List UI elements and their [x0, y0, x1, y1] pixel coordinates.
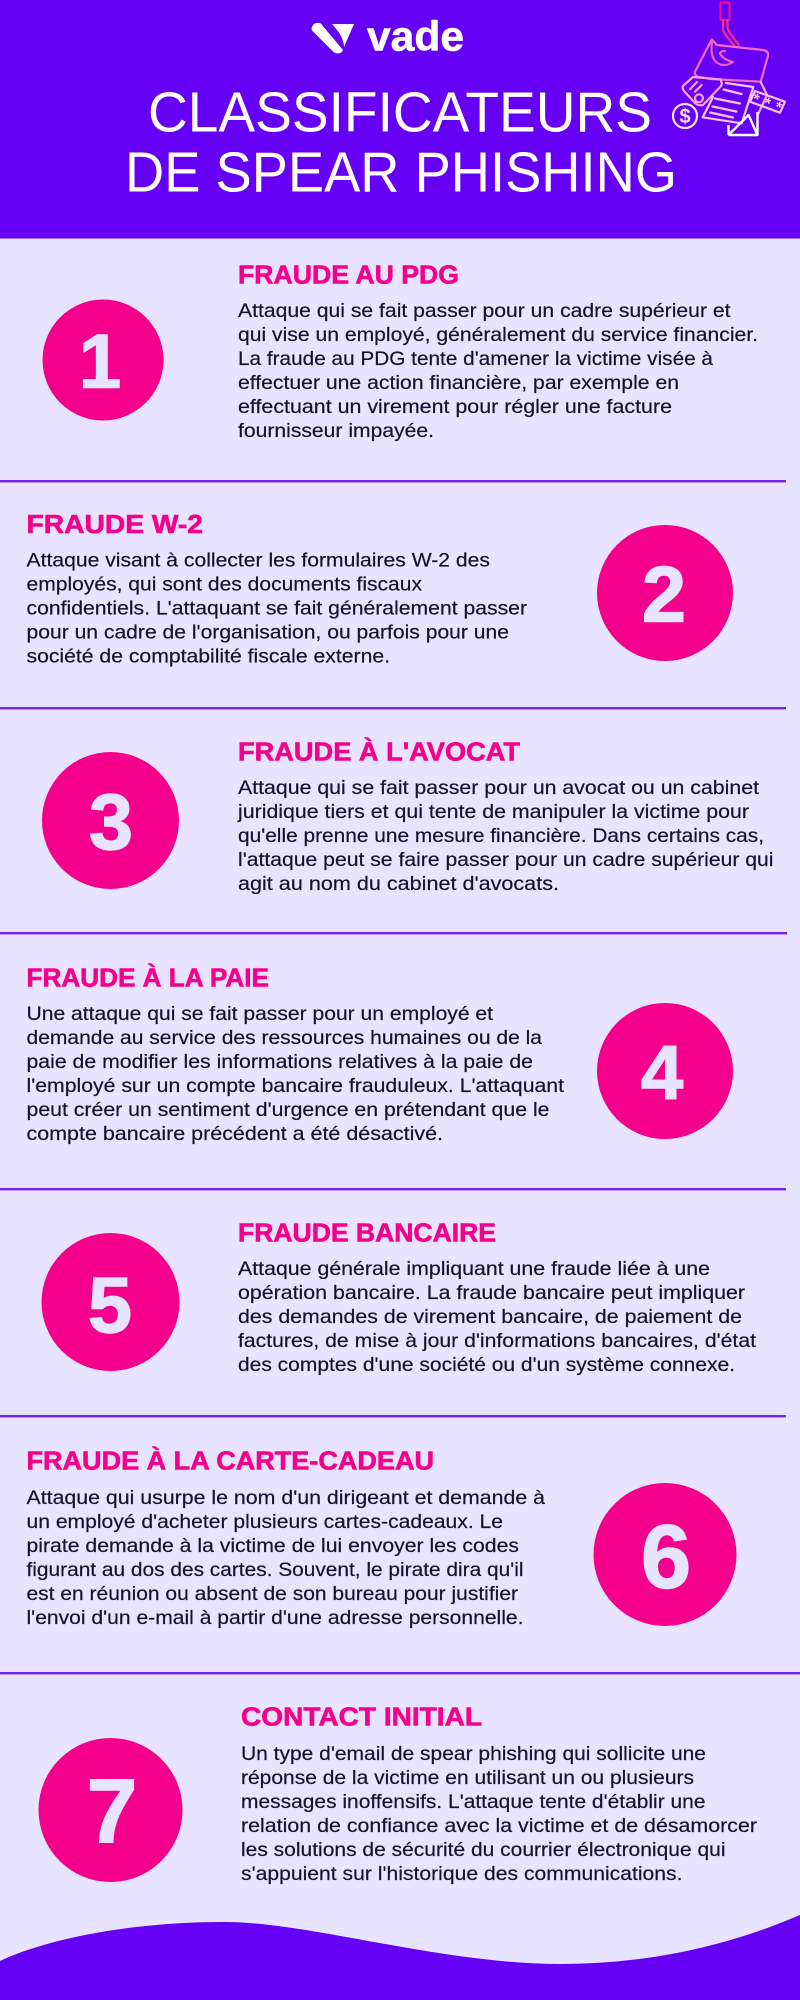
- body text 3: Attaque qui se fait passer pour un avocat ou un cabinet: [238, 777, 760, 799]
- body text 4: [26, 1003, 565, 1145]
- panel 6: fraude à la carte-cadeau: [26, 1446, 736, 1629]
- header banner: [0, 0, 800, 238]
- panel 2: fraude W-2: [26, 511, 733, 668]
- logo: vade: vade: [367, 12, 464, 60]
- body text 1: fournisseur impayée.: [238, 420, 434, 442]
- body text 4: l'employé sur un compte bancaire frauduleux. L'attaquant: [26, 1075, 565, 1097]
- panel 3: fraude à l'avocat: [42, 738, 774, 895]
- heading 6: FRAUDE À LA CARTE-CADEAU: [26, 1446, 434, 1475]
- body text 5: opération bancaire. La fraude bancaire peut impliquer: [238, 1282, 746, 1304]
- title: [125, 80, 677, 204]
- body text 2: [26, 550, 528, 668]
- body text 4: Une attaque qui se fait passer pour un employé et: [26, 1003, 494, 1025]
- number badge 1: [42, 300, 164, 420]
- body text 6: l'envoi d'un e-mail à partir d'une adresse personnelle.: [26, 1607, 524, 1629]
- number badge 6: [594, 1483, 736, 1626]
- divider lines: [0, 480, 800, 1674]
- body text 5: factures, de mise à jour d'informations bancaires, d'état: [238, 1330, 757, 1352]
- number badge 3: [42, 752, 179, 889]
- body text 7: [241, 1743, 758, 1885]
- title: CLASSIFICATEURS: [148, 80, 652, 144]
- body text 6: Attaque qui usurpe le nom d'un dirigeant et demande à: [26, 1487, 545, 1509]
- body text 3: juridique tiers et qui tente de manipuler la victime pour: [237, 801, 750, 823]
- body text 6: un employé d'acheter plusieurs cartes-cadeaux. Le: [26, 1511, 503, 1533]
- body text 7: les solutions de sécurité du courrier électronique qui: [241, 1839, 726, 1861]
- number badge 1: 1: [79, 320, 121, 404]
- heading 5: FRAUDE BANCAIRE: [238, 1220, 496, 1248]
- body text 1: Attaque qui se fait passer pour un cadre supérieur et: [238, 300, 731, 322]
- number badge 2: [597, 525, 733, 661]
- body text 7: messages inoffensifs. L'attaque tente d'établir une: [241, 1791, 706, 1813]
- number badge 4: [597, 1003, 733, 1139]
- heading 7: CONTACT INITIAL: [241, 1704, 482, 1732]
- body text 2: confidentiels. L'attaquant se fait généralement passer: [26, 598, 528, 620]
- heading 4: FRAUDE À LA PAIE: [26, 964, 269, 993]
- panel 1: fraude au PDG: [42, 262, 758, 442]
- number badge 5: [42, 1233, 180, 1371]
- body text 6: figurant au dos des cartes. Souvent, le pirate dira qu'il: [26, 1559, 524, 1581]
- body text 4: demande au service des ressources humaines ou de la: [26, 1027, 542, 1049]
- body text 6: [26, 1487, 545, 1629]
- body text 1: La fraude au PDG tente d'amener la victime visée à: [238, 348, 713, 370]
- body text 3: [237, 777, 774, 895]
- body text 5: Attaque générale impliquant une fraude liée à une: [238, 1258, 710, 1280]
- number badge 7: [38, 1738, 182, 1882]
- logo: vade: [312, 12, 464, 60]
- body text 7: relation de confiance avec la victime et de désamorcer: [241, 1815, 758, 1837]
- body text 1: effectuer une action financière, par exemple en: [238, 372, 679, 394]
- body text 6: est en réunion ou absent de son bureau pour justifier: [26, 1583, 519, 1605]
- body text 5: des demandes de virement bancaire, de paiement de: [238, 1306, 742, 1328]
- body text 7: s'appuient sur l'historique des communications.: [241, 1863, 682, 1885]
- body text 4: compte bancaire précédent a été désactivé.: [26, 1123, 443, 1145]
- body text 2: société de comptabilité fiscale externe.: [26, 646, 390, 668]
- body text 2: Attaque visant à collecter les formulaires W-2 des: [26, 550, 490, 572]
- icon: phishing hook with envelope, document, card and coin: $: [679, 106, 691, 128]
- body text 4: peut créer un sentiment d'urgence en prétendant que le: [26, 1099, 550, 1121]
- heading 3: FRAUDE À L'AVOCAT: [238, 738, 520, 767]
- body text 6: pirate demande à la victime de lui envoyer les codes: [26, 1535, 519, 1557]
- body text 3: agit au nom du cabinet d'avocats.: [238, 873, 559, 895]
- body text 7: Un type d'email de spear phishing qui sollicite une: [241, 1743, 706, 1765]
- body text 3: qu'elle prenne une mesure financière. Dans certains cas,: [238, 825, 764, 847]
- number badge 2: 2: [642, 550, 686, 638]
- number badge 5: 5: [88, 1260, 132, 1349]
- panel 7: contact initial: [38, 1704, 758, 1885]
- heading 2: FRAUDE W-2: [26, 511, 203, 539]
- body text 5: des comptes d'une société ou d'un système connexe.: [238, 1354, 735, 1376]
- title: DE SPEAR PHISHING: [125, 140, 677, 204]
- heading 1: FRAUDE AU PDG: [238, 262, 459, 290]
- body text 5: [238, 1258, 757, 1376]
- body text 3: l'attaque peut se faire passer pour un cadre supérieur qui: [238, 849, 774, 871]
- number badge 7: 7: [87, 1762, 137, 1862]
- number badge 6: 6: [641, 1508, 691, 1608]
- body text 7: réponse de la victime en utilisant un ou plusieurs: [241, 1767, 694, 1789]
- body text 2: employés, qui sont des documents fiscaux: [26, 574, 422, 596]
- number badge 4: 4: [641, 1030, 683, 1116]
- body text 4: paie de modifier les informations relatives à la paie de: [26, 1051, 533, 1073]
- body text 1: effectuant un virement pour régler une facture: [238, 396, 672, 418]
- icon: phishing hook with envelope, document, card and coin: [673, 2, 785, 135]
- icon: phishing hook with envelope, document, card and coin: ***: [750, 91, 785, 117]
- footer wave: [0, 1915, 800, 2000]
- number badge 3: 3: [89, 777, 133, 866]
- body text 2: pour un cadre de l'organisation, ou parfois pour une: [26, 622, 509, 644]
- panel 5: fraude bancaire: [42, 1220, 757, 1376]
- panel 4: fraude à la paie: [26, 964, 733, 1145]
- body text 1: [238, 300, 758, 442]
- body text 1: qui vise un employé, généralement du service financier.: [238, 324, 758, 346]
